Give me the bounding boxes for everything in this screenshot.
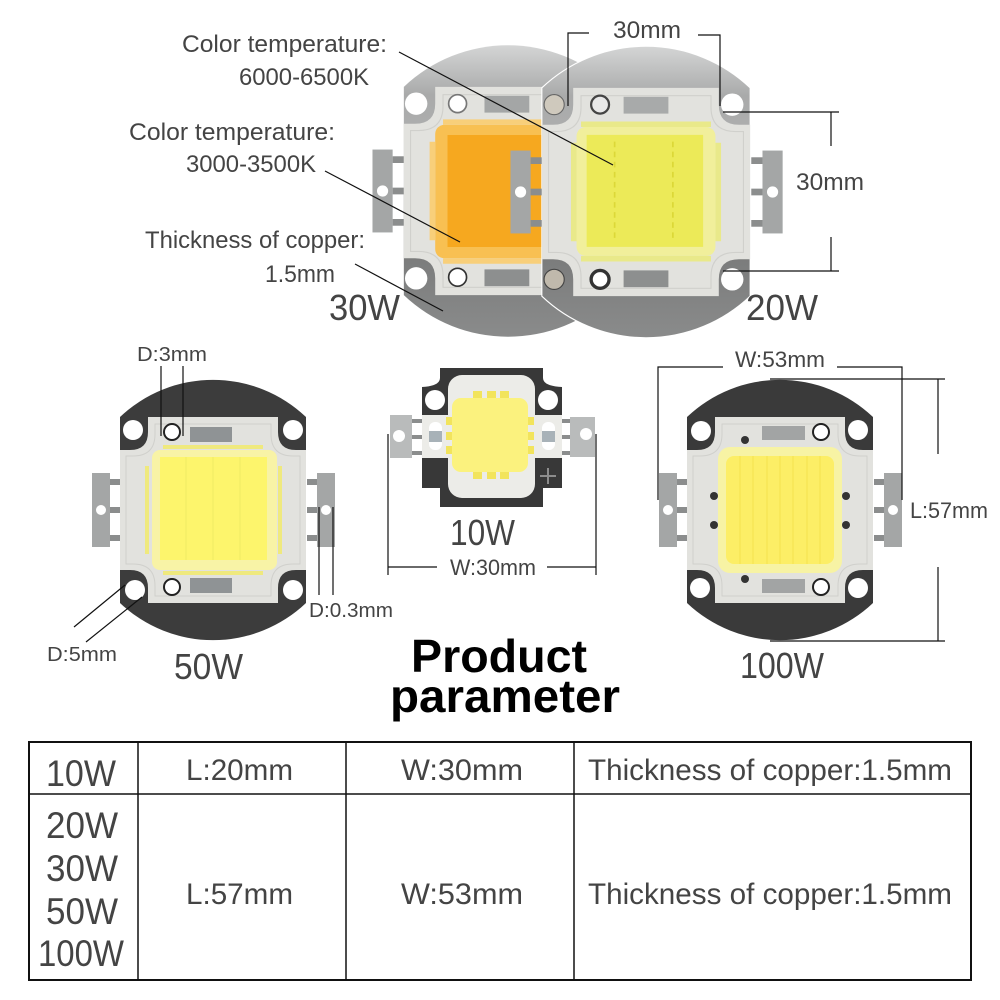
row: 20W to 100W: L:57mm: [186, 878, 293, 911]
callout: color temperature warm: Color temperature:: [129, 119, 335, 146]
row: 20W to 100W: 20W: [46, 805, 118, 846]
callout: thickness of copper: Thickness of copper:: [145, 227, 365, 254]
row: 10W: [46, 753, 952, 794]
callout: color temperature warm: 3000-3500K: [186, 151, 316, 178]
dimension: width 30mm: 30mm: [613, 17, 681, 44]
dimension: D 5mm: D:5mm: [47, 644, 117, 666]
row: 20W to 100W: [38, 805, 952, 974]
callout: color temperature cool: 6000-6500K: [239, 64, 369, 91]
row: 20W to 100W: 30W: [46, 848, 118, 889]
label: 100W: 100W: [740, 645, 824, 686]
chip: 20W cool white: [510, 46, 783, 338]
dimension: W 53mm: W:53mm: [735, 347, 825, 372]
dimension: D 5mm: [47, 585, 142, 666]
dimension: D 3mm: D:3mm: [137, 344, 207, 366]
title: parameter: [390, 670, 620, 722]
row: 20W to 100W: 100W: [38, 933, 124, 974]
chip: 100W: [659, 380, 902, 640]
dimension: width 30mm: [568, 17, 720, 106]
chip: 30W warm white: [372, 45, 645, 337]
dimension: W 30mm: W:30mm: [450, 555, 536, 580]
dimension: W 30mm: [388, 434, 596, 580]
title: [390, 630, 620, 722]
callout: thickness of copper: 1.5mm: [265, 261, 335, 288]
dimension: D 3mm: [137, 344, 207, 436]
row: 10W: L:20mm: [186, 754, 293, 787]
label: 30W: 30W: [329, 287, 400, 328]
label: 10W: 10W: [450, 512, 515, 553]
row: 10W: W:30mm: [401, 754, 523, 787]
table: product parameters: [29, 742, 971, 980]
dimension: D 0.3mm: [309, 507, 393, 622]
row: 20W to 100W: W:53mm: [401, 878, 523, 911]
callout: thickness of copper: [145, 227, 443, 311]
callout: color temperature cool: Color temperature:: [182, 31, 387, 58]
dimension: height 30mm: [723, 112, 864, 271]
dimension: L 57mm: [770, 379, 988, 641]
chip: 10W: [390, 368, 595, 507]
dimension: W 53mm: [658, 347, 902, 500]
row: 20W to 100W: Thickness of copper:1.5mm: [588, 878, 952, 911]
title: Product: [411, 630, 587, 682]
dimension: D 0.3mm: D:0.3mm: [309, 600, 393, 622]
row: 10W: 10W: [46, 753, 116, 794]
row: 10W: Thickness of copper:1.5mm: [588, 754, 952, 787]
dimension: height 30mm: 30mm: [796, 169, 864, 196]
callout: color temperature cool: [182, 31, 613, 165]
dimension: L 57mm: L:57mm: [910, 498, 988, 523]
chip: 50W: [92, 380, 335, 640]
label: 50W: 50W: [174, 646, 243, 687]
callout: color temperature warm: [129, 119, 460, 242]
row: 20W to 100W: 50W: [46, 891, 118, 932]
label: 20W: 20W: [746, 287, 818, 328]
